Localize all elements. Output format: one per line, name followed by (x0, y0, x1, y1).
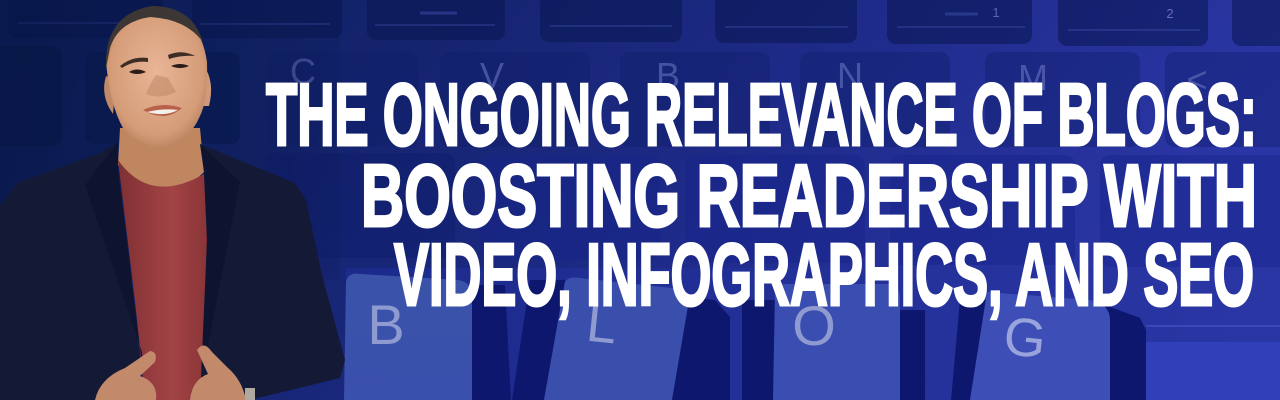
keyboard middle row keys (0, 46, 1280, 147)
head (106, 9, 207, 148)
raised key: B (344, 274, 472, 400)
neck (118, 128, 204, 193)
top row key highlights (18, 13, 1200, 30)
watch (245, 388, 255, 400)
raised key: O: O (792, 294, 836, 357)
middle row key letters: B (656, 55, 680, 96)
left darkening (0, 0, 340, 280)
keyboard top row keys (8, 0, 1280, 46)
right hand (190, 345, 246, 400)
middle row key letters: C (290, 51, 316, 92)
raised key: G (970, 292, 1110, 400)
key shadows (472, 280, 1146, 400)
middle row key letters (290, 51, 1208, 100)
smile (143, 105, 182, 116)
blazer (0, 142, 345, 400)
shirt (118, 160, 207, 400)
raised key: B: B (367, 293, 405, 356)
eyes (129, 64, 189, 74)
keyboard lower band (346, 268, 1280, 400)
nose (146, 75, 176, 97)
raised key: L (544, 278, 688, 400)
key legends top row: 1 (992, 5, 1000, 20)
middle row key letters: M (1018, 57, 1048, 98)
presenter portrait (0, 6, 345, 400)
ears (104, 76, 116, 114)
raised key: L: L (584, 293, 620, 356)
left hand (95, 351, 156, 400)
middle row key letters: < (1186, 59, 1208, 100)
raised key: G: G (1001, 306, 1049, 370)
keyboard lower row keys (265, 153, 1280, 267)
hair (106, 6, 203, 68)
eyebrows (120, 52, 195, 68)
raised key: O (773, 284, 900, 400)
middle row key letters: V (480, 55, 504, 96)
middle row key letters: N (837, 55, 863, 96)
background: keyboard photo: 2 (1166, 6, 1174, 21)
headline (266, 65, 1257, 324)
